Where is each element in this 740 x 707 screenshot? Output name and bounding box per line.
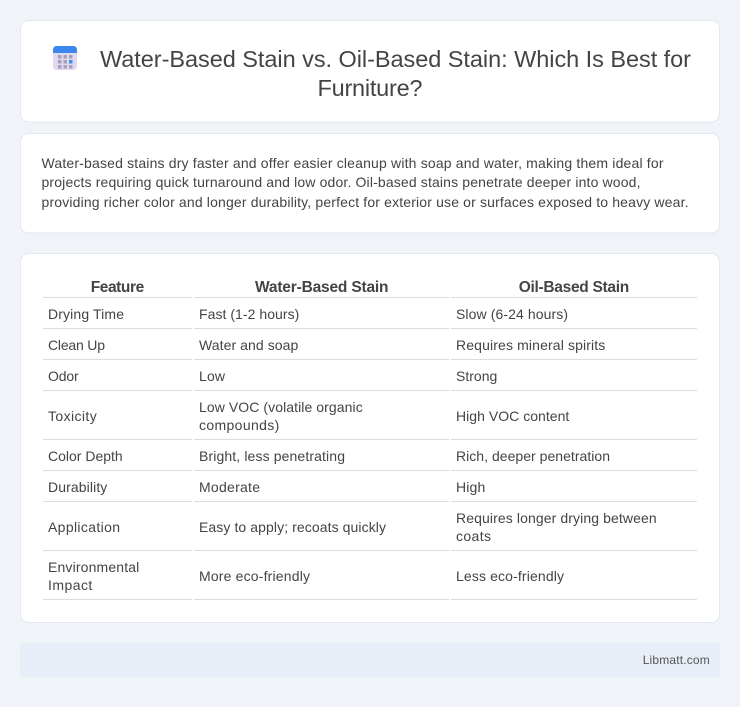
row: clean up: Clean Up	[48, 337, 105, 353]
row: color depth: Bright, less penetrating	[199, 448, 345, 464]
row: color depth: Rich, deeper penetration	[456, 448, 610, 464]
row: drying time: Fast (1-2 hours)	[199, 306, 299, 322]
row: durability: High	[456, 479, 485, 495]
title: Furniture?	[318, 75, 422, 101]
table header: Oil-Based Stain	[519, 279, 629, 296]
row: application: coats	[456, 528, 491, 544]
row: durability: Moderate	[199, 479, 260, 495]
row: clean up: Requires mineral spirits	[456, 337, 605, 353]
row: clean up	[48, 337, 605, 353]
footer	[20, 643, 720, 677]
intro text: providing richer color and longer durability, perfect for exterior use or surfaces exposed to heavy wear.	[42, 194, 688, 210]
row: clean up: Water and soap	[199, 337, 299, 353]
intro text: projects requiring quick turnaround and low odor. Oil-based stains penetrate deeper into wood,	[42, 174, 640, 190]
row: environmental impact: Impact	[48, 577, 92, 593]
row: toxicity: Toxicity	[48, 408, 97, 424]
row: environmental impact: Environmental	[48, 559, 139, 575]
row: toxicity	[48, 399, 569, 433]
icon: calendar	[53, 46, 77, 70]
row: color depth	[48, 448, 610, 464]
panel: introduction	[20, 134, 720, 233]
intro text	[42, 155, 688, 210]
row: application: Easy to apply; recoats quickly	[199, 519, 386, 535]
row: color depth: Color Depth	[48, 448, 123, 464]
row: application: Application	[48, 519, 120, 535]
row: application: Requires longer drying between	[456, 510, 657, 526]
row: environmental impact: Less eco-friendly	[456, 568, 564, 584]
row: environmental impact: More eco-friendly	[199, 568, 310, 584]
table header: Water-Based Stain	[255, 279, 388, 296]
panel: title card	[20, 20, 720, 122]
table header	[91, 279, 629, 296]
intro text: Water-based stains dry faster and offer easier cleanup with soap and water, making them ideal for	[42, 155, 664, 171]
panel: comparison table	[20, 254, 720, 622]
row: odor: Strong	[456, 368, 497, 384]
row: drying time: Slow (6-24 hours)	[456, 306, 568, 322]
row: odor: Low	[199, 368, 226, 384]
title	[100, 46, 691, 101]
row: durability: Durability	[48, 479, 107, 495]
row: toxicity: compounds)	[199, 417, 279, 433]
row: toxicity: Low VOC (volatile organic	[199, 399, 363, 415]
footer source text: Libmatt.com	[643, 653, 710, 667]
row: application	[48, 510, 657, 544]
row: odor: Odor	[48, 368, 79, 384]
row: environmental impact	[48, 559, 564, 593]
row: odor	[48, 368, 497, 384]
row: toxicity: High VOC content	[456, 408, 569, 424]
table header: Feature	[91, 279, 145, 296]
title: Water-Based Stain vs. Oil-Based Stain: Which Is Best for	[100, 46, 691, 72]
row: drying time: Drying Time	[48, 306, 124, 322]
row: drying time	[48, 306, 568, 322]
row: durability	[48, 479, 485, 495]
